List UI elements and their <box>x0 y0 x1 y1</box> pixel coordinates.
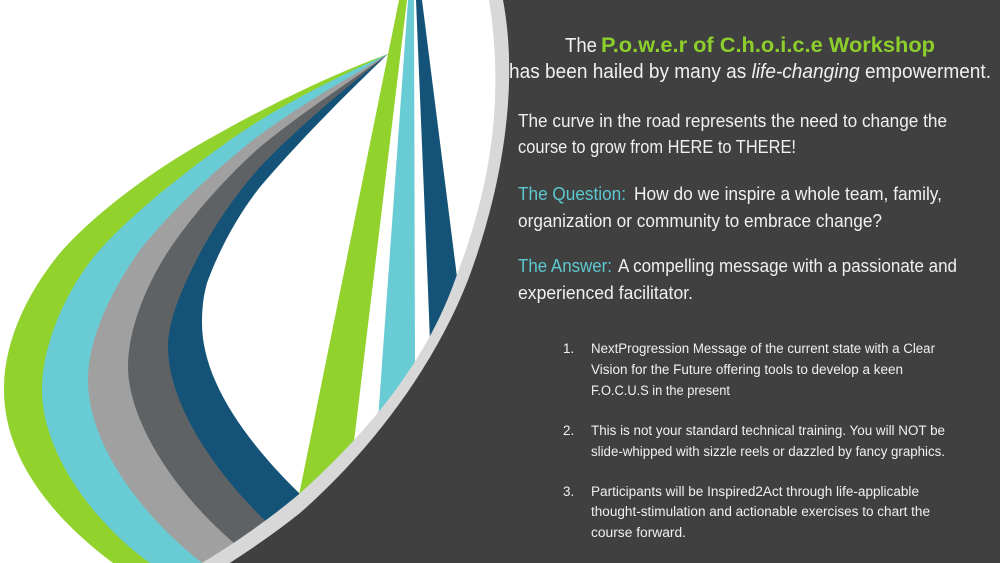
heading line 1: The <box>565 35 597 57</box>
road graphic: curved and straight bands <box>4 0 520 563</box>
list item 1 <box>563 341 936 398</box>
curved band: cyan <box>42 54 420 563</box>
list item 2: slide-whipped with sizzle reels or dazzled by fancy graphics. <box>591 444 945 459</box>
list item 1: Vision for the Future offering tools to develop a keen <box>591 362 903 377</box>
heading line 2: has been hailed by many as life-changing empowerment. <box>509 61 991 83</box>
list item 3: Participants will be Inspired2Act through life-applicable <box>591 484 919 499</box>
dark panel <box>225 0 1000 563</box>
text block: the answer: A compelling message with a passionate and <box>618 256 957 276</box>
straight band: cyan <box>378 0 415 420</box>
list item 3: 3. <box>563 484 574 499</box>
text block: the answer <box>518 256 957 303</box>
straight band: navy <box>416 0 458 342</box>
list item 1: NextProgression Message of the current state with a Clear <box>591 341 936 356</box>
text block: the curve: course to grow from HERE to THERE! <box>518 137 796 157</box>
workshop name: P.o.w.e.r of C.h.o.i.c.e Workshop <box>601 33 935 57</box>
text block: the curve <box>518 111 947 157</box>
list item 1: 1. <box>563 341 574 356</box>
list item 3: thought-stimulation and actionable exercises to chart the <box>591 504 930 519</box>
heading <box>509 33 991 83</box>
list item 2: This is not your standard technical training. You will NOT be <box>591 423 945 438</box>
curved band: navy <box>168 54 420 563</box>
curved band: dark gray <box>128 54 420 563</box>
curved band: green <box>4 54 420 563</box>
curved band: light gray <box>88 54 420 563</box>
heading line 1 <box>565 33 935 57</box>
road interior: white <box>202 0 520 530</box>
list item 2 <box>563 423 945 459</box>
list item 3 <box>563 484 930 540</box>
text block: the question: organization or community to embrace change? <box>518 211 882 231</box>
text block: the question <box>518 184 942 231</box>
text block: the question: How do we inspire a whole team, family, <box>634 184 942 204</box>
text block: the answer: experienced facilitator. <box>518 283 693 303</box>
list item 2: 2. <box>563 423 574 438</box>
straight band: green <box>298 0 407 500</box>
list item 3: course forward. <box>591 525 686 540</box>
text block: the answer: The Answer: <box>518 256 612 276</box>
text block: the question: The Question: <box>518 184 626 204</box>
text block: the curve: The curve in the road represents the need to change the <box>518 111 947 131</box>
list item 1: F.O.C.U.S in the present <box>591 383 730 398</box>
